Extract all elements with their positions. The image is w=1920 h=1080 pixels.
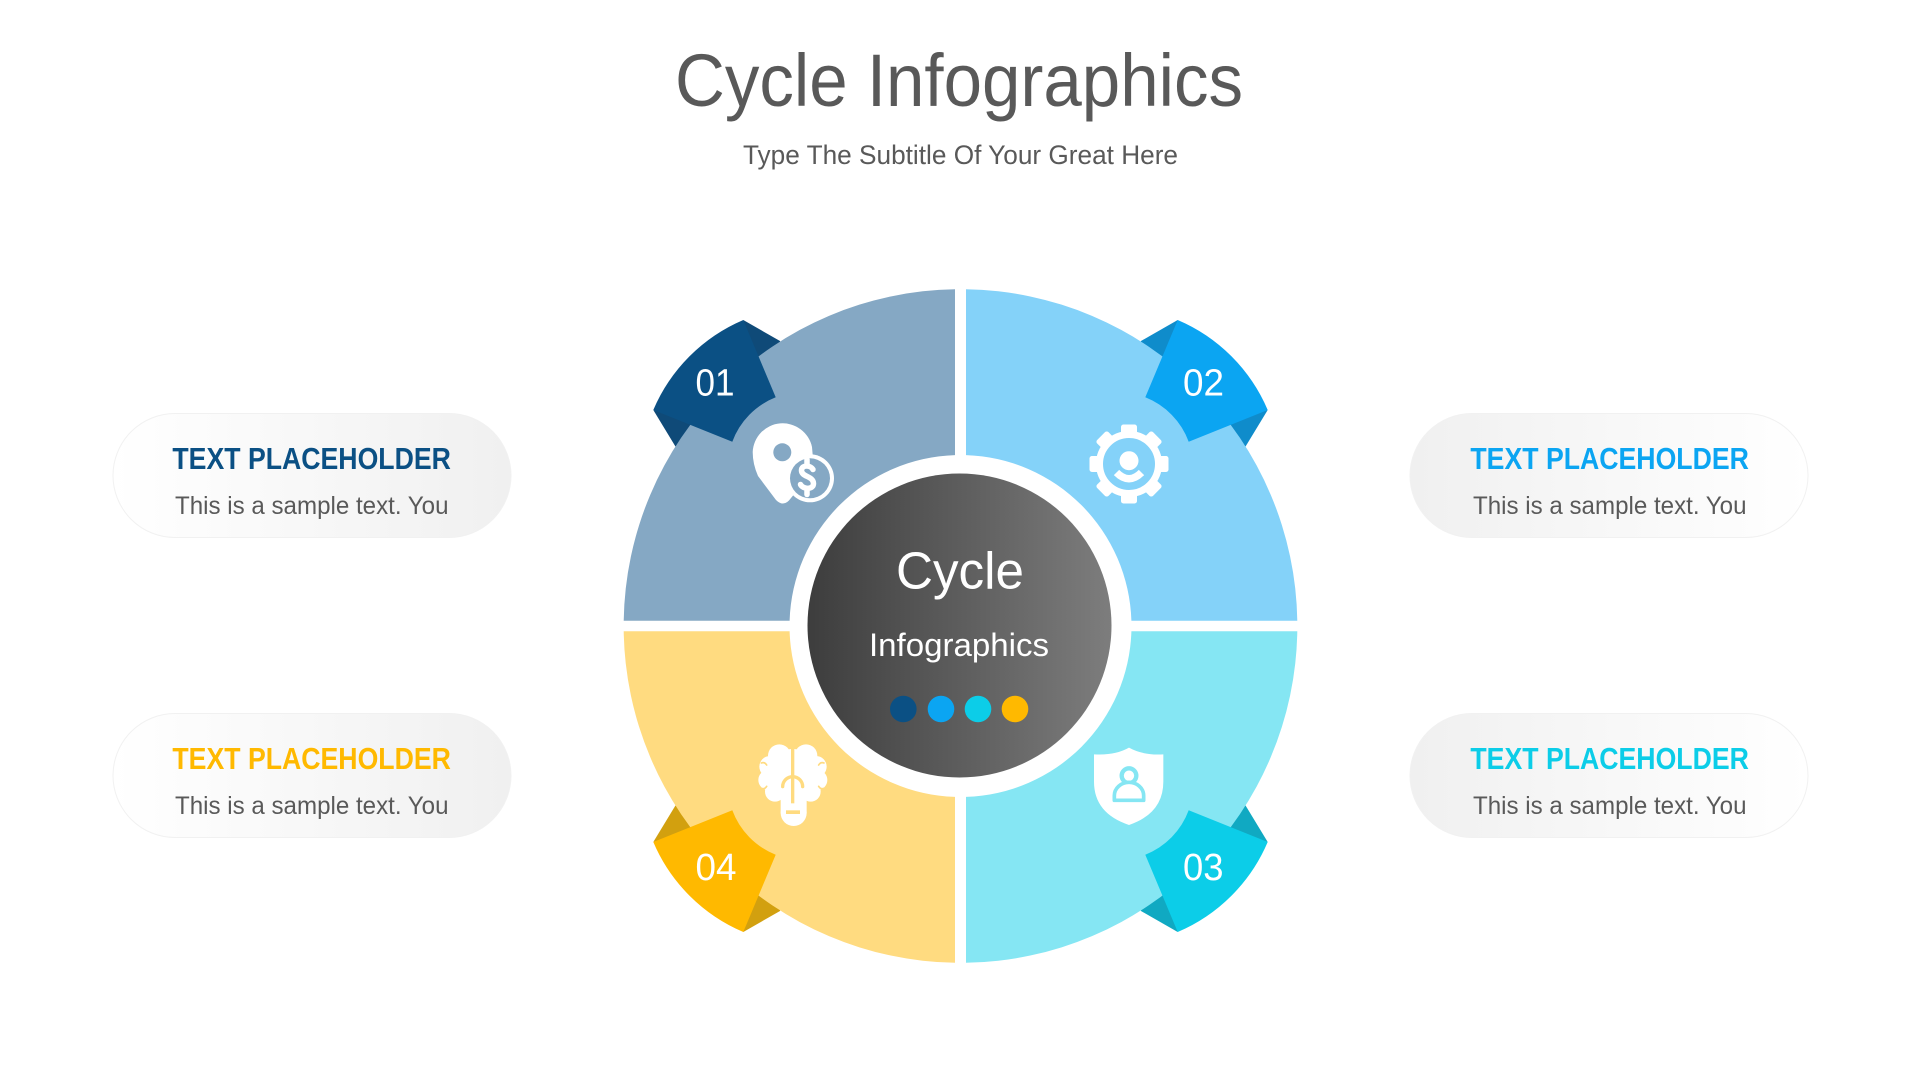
panel: text placeholder 03: This is a sample text. You — [1473, 792, 1746, 820]
panel: text placeholder 01: This is a sample text. You — [175, 492, 448, 520]
panel: text placeholder 02: This is a sample text. You — [1473, 492, 1746, 520]
panel: text placeholder 02: TEXT PLACEHOLDER — [1470, 441, 1749, 476]
center circle — [808, 474, 1112, 778]
panel: quadrant 03: 03 — [1183, 847, 1224, 889]
panel: text placeholder 01: TEXT PLACEHOLDER — [172, 441, 451, 476]
title: Cycle Infographics — [675, 39, 1243, 122]
panel: text placeholder 03 — [1410, 714, 1808, 838]
subtitle: Type The Subtitle Of Your Great Here — [743, 140, 1178, 170]
panel: text placeholder 01 — [113, 414, 511, 538]
panel: quadrant 02 — [966, 289, 1297, 621]
panel: text placeholder 03: TEXT PLACEHOLDER — [1470, 741, 1749, 776]
icon: location pin with dollar — [753, 423, 834, 504]
panel: quadrant 02: 02 — [1183, 362, 1224, 404]
center circle: Infographics — [869, 627, 1049, 663]
panel: quadrant 04 — [624, 631, 955, 963]
panel: text placeholder 04: This is a sample text. You — [175, 792, 448, 820]
icon: shield with person — [1094, 748, 1163, 825]
panel: text placeholder 02 — [1410, 414, 1808, 538]
icon: brain light bulb — [758, 744, 827, 826]
panel: quadrant 04: 04 — [696, 847, 736, 889]
center circle: Cycle — [896, 542, 1024, 600]
panel: text placeholder 04 — [113, 714, 511, 838]
panel: quadrant 01 — [624, 289, 955, 621]
icon: gear with person — [1090, 424, 1168, 504]
panel: quadrant 01: 01 — [696, 362, 734, 404]
panel: quadrant 03 — [966, 631, 1297, 963]
panel: text placeholder 04: TEXT PLACEHOLDER — [172, 741, 451, 776]
